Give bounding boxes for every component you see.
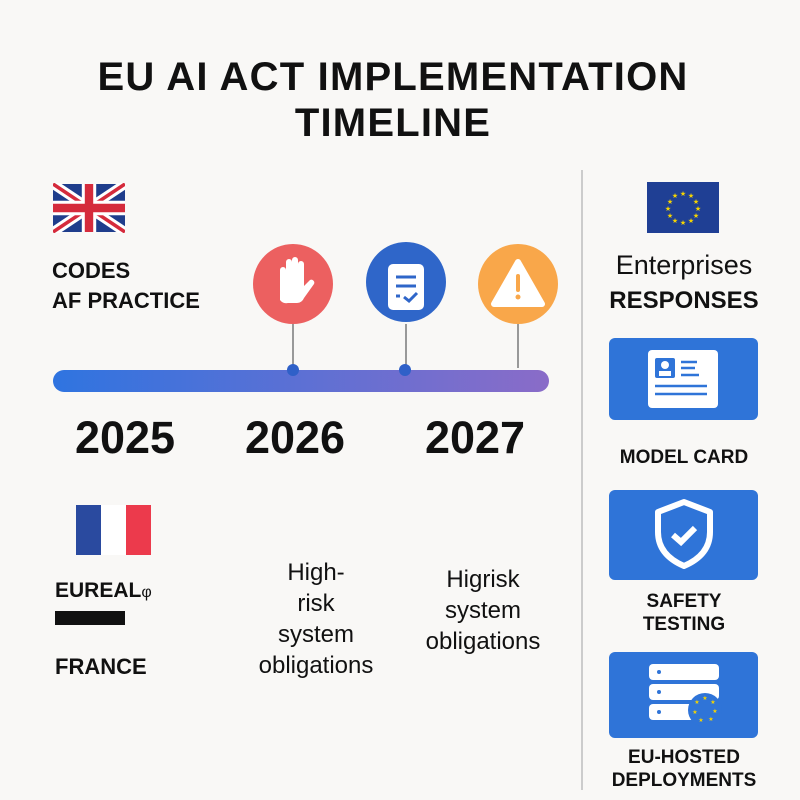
text: high-risk 2026: system [278, 621, 354, 648]
divider [581, 170, 583, 790]
heading: enterprise responses [609, 250, 759, 314]
icon: EU flag: ★ [693, 212, 699, 220]
label: safety testing: SAFETY [647, 591, 721, 612]
icon: EU flag: ★ [667, 198, 673, 206]
icon: EU flag: ★ [680, 219, 686, 227]
icon: warning [478, 244, 558, 368]
icon: EU flag: ★ [667, 212, 673, 220]
text: France: FRANCE [55, 654, 147, 679]
card: eu hosted: ★ [712, 708, 718, 715]
text: high-risk 2026: risk [297, 590, 335, 617]
card: safety testing [609, 490, 758, 580]
icon: EU flag: ★ [688, 217, 694, 225]
text: 2027 [425, 412, 525, 463]
timeline bar [53, 364, 549, 392]
text: high-risk 2026: obligations [259, 652, 373, 679]
icon: France flag [76, 505, 151, 555]
label: safety testing [643, 591, 725, 635]
icon: EU flag: ★ [672, 217, 678, 225]
card: eu hosted [609, 652, 758, 738]
card: eu hosted: ★ [702, 695, 708, 702]
timeline icons [253, 242, 558, 368]
years: 2025 [75, 412, 175, 463]
label: eu hosted deployments [612, 747, 756, 791]
text: high-risk 2026 [259, 559, 373, 679]
card: eu hosted: ★ [694, 699, 700, 706]
text: codes of practice [52, 258, 200, 313]
label: model card: MODEL CARD [620, 447, 748, 468]
icon: EU flag: ★ [680, 190, 686, 198]
card: eu hosted: ★ [708, 716, 714, 723]
text: EUREAL: EUREALφ [55, 579, 152, 602]
heading: enterprise responses: Enterprises [616, 250, 752, 280]
icon: checklist [366, 242, 446, 370]
icon: stop hand [253, 244, 333, 370]
text: codes of practice: AF PRACTICE [52, 288, 200, 313]
icon: EU flag: ★ [665, 205, 671, 213]
text: high-risk 2027: Higrisk [446, 566, 520, 593]
icon: EU flag: ★ [695, 205, 701, 213]
text: high-risk 2027: obligations [426, 628, 540, 655]
label: eu hosted deployments: EU-HOSTED [628, 747, 740, 768]
icon: UK flag [53, 183, 125, 233]
text: high-risk 2027: system [445, 597, 521, 624]
icon: EU flag [647, 182, 719, 233]
title [98, 55, 688, 145]
icon: EU flag: ★ [693, 198, 699, 206]
card: eu hosted: ★ [698, 717, 704, 724]
card: model card [609, 338, 758, 420]
text: codes of practice: CODES [52, 258, 130, 283]
title: TIMELINE [295, 101, 491, 145]
label: safety testing: TESTING [643, 614, 725, 635]
card: eu hosted: ★ [710, 699, 716, 706]
title: EU AI ACT IMPLEMENTATION [98, 55, 688, 99]
text: high-risk 2027 [426, 566, 540, 655]
card: eu hosted: ★ [692, 709, 698, 716]
text: 2026 [245, 412, 345, 463]
icon: EU flag: ★ [672, 192, 678, 200]
label: eu hosted deployments: DEPLOYMENTS [612, 770, 756, 791]
text: high-risk 2026: High- [287, 559, 345, 586]
icon: EU flag: ★ [688, 192, 694, 200]
redaction bar [55, 611, 125, 625]
heading: enterprise responses: RESPONSES [609, 287, 759, 314]
